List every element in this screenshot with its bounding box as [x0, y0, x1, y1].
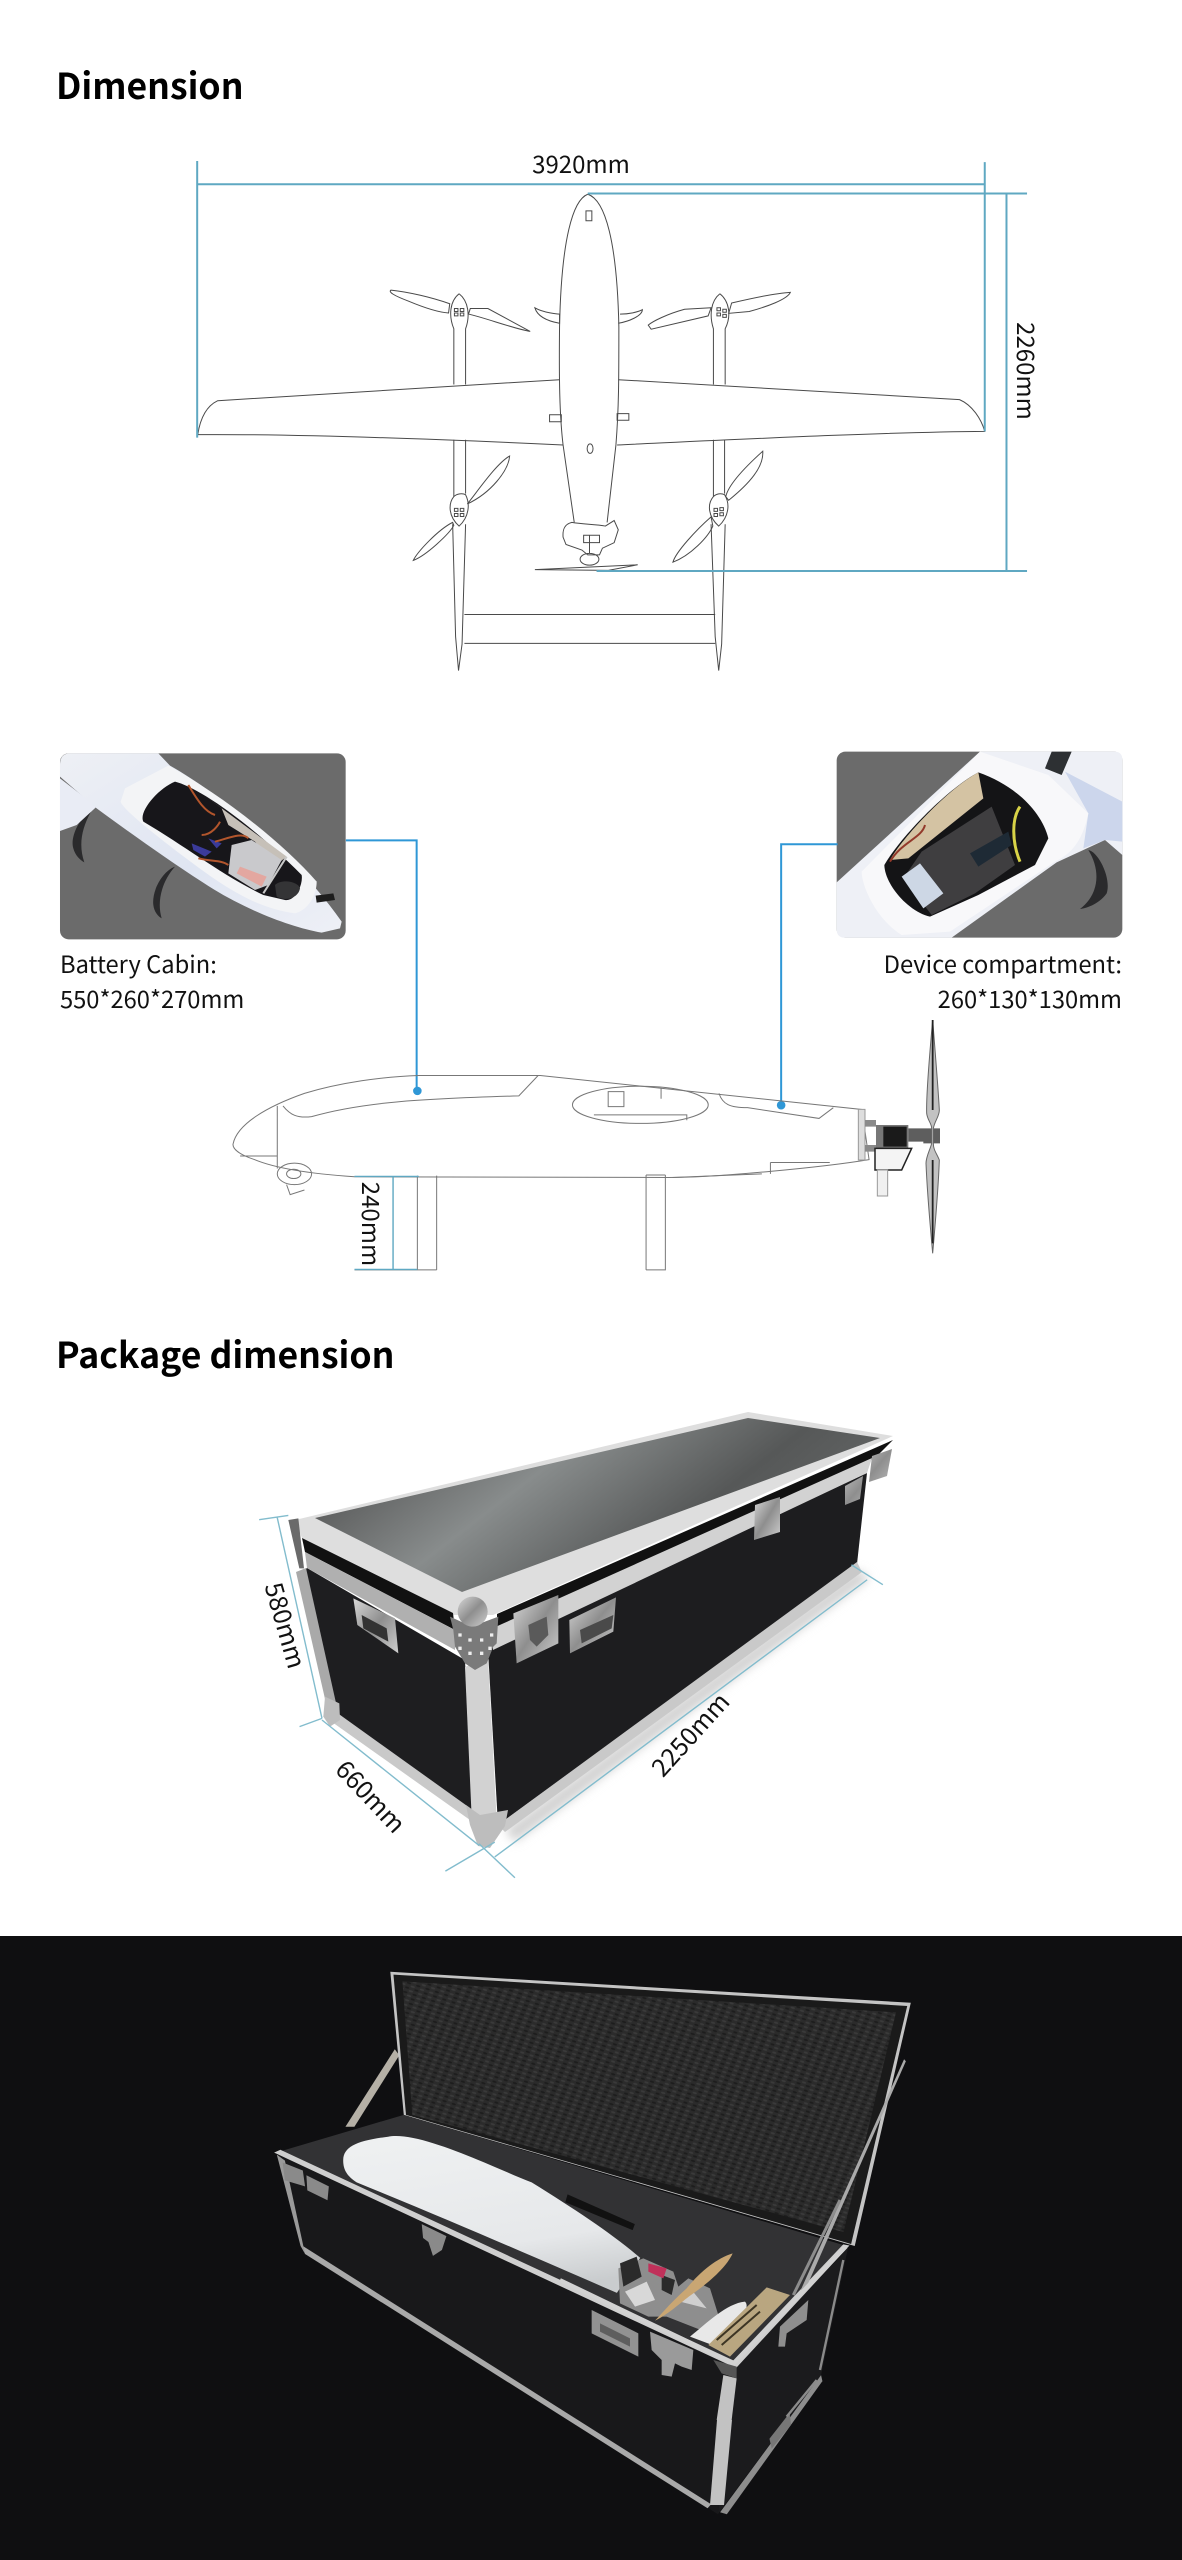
battery cabin photo — [60, 753, 346, 939]
left side face — [302, 1568, 472, 1815]
side handle — [353, 1598, 398, 1653]
rotor blade — [1080, 850, 1108, 909]
label: 580mm: 580mm — [257, 1578, 316, 1672]
front castor wheel — [466, 1805, 508, 1848]
foam lining — [402, 1981, 896, 2232]
spinner — [680, 2290, 707, 2308]
handle recess — [600, 2323, 630, 2347]
divider bar — [263, 857, 287, 893]
antenna — [1045, 752, 1072, 775]
rear motor and pusher propeller — [535, 521, 638, 570]
shaft and hub — [908, 1128, 940, 1143]
aircraft body — [837, 752, 1122, 938]
hatch surround — [862, 752, 1088, 935]
front side face — [488, 1473, 867, 1825]
case interior — [276, 2115, 847, 2367]
label: 660mm: 660mm — [328, 1751, 415, 1840]
front rim overlay — [560, 2247, 846, 2363]
front handle — [569, 1597, 616, 1653]
rear corner fitting — [288, 1518, 304, 1568]
text: device compartment — [884, 945, 1122, 1015]
text: battery cabin: Battery Cabin: — [60, 946, 217, 980]
right latch — [778, 2300, 808, 2347]
back latches — [845, 1449, 892, 1505]
device compartment photo — [837, 752, 1122, 938]
rivets — [458, 1633, 493, 1655]
motor core — [883, 1127, 907, 1147]
handle and centre latch — [283, 2163, 446, 2256]
lid frame — [295, 1412, 893, 1615]
hub bolts — [454, 308, 726, 516]
corner bracket — [450, 1617, 498, 1670]
corner post — [717, 2375, 737, 2420]
propeller hubs — [450, 494, 728, 526]
band background — [0, 1936, 1182, 2560]
front latch — [650, 2332, 693, 2377]
booms and tail bars — [451, 294, 729, 671]
strut — [877, 1170, 888, 1196]
rear bay — [275, 881, 300, 899]
cabin opening — [143, 782, 302, 900]
landing skids — [354, 1175, 665, 1270]
latch centre — [528, 1617, 548, 1647]
motor dark parts — [620, 2257, 675, 2295]
right face — [718, 2248, 848, 2514]
lid shadow gap — [302, 1440, 893, 1630]
electronics — [192, 838, 222, 857]
lid stay left — [345, 2049, 399, 2127]
wiring — [188, 785, 248, 865]
device compartment callout line — [777, 844, 838, 1109]
text: device compartment: 260*130*130mm — [938, 981, 1122, 1015]
aircraft fuselage — [343, 2136, 640, 2293]
floor panel — [970, 832, 1012, 867]
front face — [278, 2155, 736, 2514]
upper rim — [276, 2151, 848, 2367]
side nacelle — [60, 778, 97, 831]
battery hatch — [283, 1075, 538, 1117]
tan wall — [890, 772, 983, 860]
compartment opening — [884, 772, 1048, 917]
open lid frame — [390, 1972, 911, 2246]
battery — [228, 840, 282, 890]
right edge rail — [787, 2260, 843, 2417]
bottom rail — [303, 2246, 711, 2508]
battery label — [237, 867, 267, 887]
package dimension lines — [259, 1515, 883, 1878]
wing shadow — [1065, 772, 1122, 848]
inner side wall — [202, 793, 287, 866]
text: battery cabin: 550*260*270mm — [60, 981, 244, 1015]
centre latch — [754, 1497, 780, 1540]
front rail — [493, 1458, 872, 1650]
motor and propeller, side view — [858, 1020, 940, 1253]
tail cone ribs — [858, 1109, 865, 1160]
propellers — [390, 290, 790, 562]
ground shadow — [505, 1570, 870, 1842]
motor cowl — [875, 1148, 912, 1170]
tailplane stubs — [535, 308, 642, 323]
label: 2250mm: 2250mm — [642, 1684, 737, 1784]
callout dot — [777, 1101, 785, 1109]
lower corner post — [710, 2420, 732, 2505]
end handle — [769, 2413, 791, 2449]
handle recess — [580, 1615, 613, 1643]
text: battery cabin — [60, 946, 244, 1015]
lid stay right — [801, 2059, 906, 2292]
text: device compartment: Device compartment: — [884, 945, 1122, 980]
fuselage outline — [233, 1075, 869, 1177]
device hatch — [719, 1093, 833, 1118]
rear wheel — [323, 1697, 340, 1727]
motor assembly — [618, 2258, 718, 2332]
red motor part — [648, 2263, 667, 2278]
heading: Package dimension: Package dimension — [56, 1328, 394, 1379]
left post — [277, 2155, 305, 2254]
wing root oval — [572, 1086, 708, 1123]
propeller blades — [926, 1020, 939, 1253]
width dimension lines — [197, 161, 985, 438]
right bottom rail — [720, 2375, 822, 2514]
motor housing — [876, 1125, 908, 1148]
side-view aircraft drawing — [233, 1075, 869, 1270]
top-view aircraft drawing — [198, 194, 985, 671]
open flight case with aircraft — [276, 1972, 911, 2514]
belly fairing — [673, 1162, 830, 1177]
rotor blade in case — [565, 2194, 635, 2230]
motor frame highlight — [625, 2282, 655, 2307]
label: 3920mm: 3920mm — [532, 145, 630, 180]
heading: Dimension: Dimension — [56, 59, 244, 110]
label: 2260mm: 2260mm — [1010, 322, 1045, 420]
case detail, traced near corner — [560, 2200, 846, 2420]
red wire — [890, 825, 925, 862]
nose sensor — [316, 893, 335, 903]
corner bracket — [713, 2360, 737, 2378]
fuselage outline — [559, 194, 619, 522]
front wheel — [277, 1163, 312, 1195]
manual writing — [717, 2305, 760, 2345]
hatch surround — [121, 766, 317, 913]
blade centre lines — [932, 1020, 934, 1243]
closed flight case — [288, 1412, 893, 1848]
callout dot — [413, 1087, 422, 1095]
left corner post — [296, 1568, 338, 1712]
bottom rails — [332, 1562, 862, 1832]
packed parts — [690, 2302, 747, 2347]
dark band: open case photo — [0, 1936, 1182, 2560]
left rail — [305, 1552, 455, 1650]
centre post — [465, 1657, 497, 1825]
height dimension lines — [588, 194, 1027, 571]
lid top surface — [315, 1418, 880, 1592]
side handle — [592, 2310, 638, 2357]
manual box — [708, 2287, 790, 2357]
motor mounts — [865, 1120, 876, 1152]
ground clearance dimension — [354, 1176, 419, 1270]
floor — [903, 807, 1015, 915]
corner ball — [458, 1597, 488, 1627]
hardware, traced near corner — [288, 1518, 616, 1727]
photo background — [837, 752, 1122, 938]
aircraft body — [60, 753, 342, 933]
wooden propeller — [655, 2253, 733, 2321]
wings — [198, 380, 985, 445]
rotor blades — [73, 812, 175, 918]
lid inner gap — [393, 1975, 907, 2244]
photo background — [60, 753, 346, 939]
label: 240mm: 240mm — [355, 1182, 390, 1266]
lid stay — [793, 2200, 840, 2295]
yellow cable — [1014, 807, 1020, 862]
side handle recess — [362, 1615, 388, 1642]
front latch — [513, 1595, 558, 1663]
device module — [902, 863, 943, 908]
battery cabin callout line — [346, 840, 422, 1095]
